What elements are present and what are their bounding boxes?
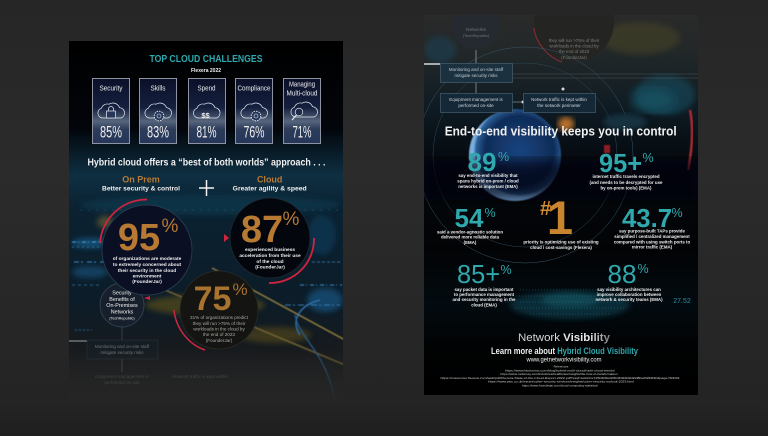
circle: 87 percent xyxy=(224,198,314,283)
card: spend: $$ xyxy=(201,111,210,120)
card: spend: 81% xyxy=(196,122,216,142)
faded flow box xyxy=(69,326,158,372)
on prem label: Better security & control xyxy=(102,186,180,193)
circle: 87 percent: acceleration from their use xyxy=(239,253,301,259)
faded lower boxes xyxy=(95,374,228,385)
faded circle 75 xyxy=(533,20,614,62)
cloud label: Cloud xyxy=(257,175,282,185)
circle: 95 percent: their security in the cloud xyxy=(118,268,176,274)
circle: 87 percent: % xyxy=(283,209,300,230)
stat: #1 priority xyxy=(524,201,598,250)
panel: end-to-end visibility xyxy=(417,0,698,395)
card: compliance xyxy=(236,78,272,144)
on prem label xyxy=(102,176,180,192)
stat: 95+ percent: by on-prem tools) (EMA) xyxy=(601,186,652,190)
references: https://www.factioninc.com/blog/hybrid-multi-cloud/multi-cloud-trends/ xyxy=(505,368,615,372)
stat: 95+ percent: % xyxy=(642,151,654,165)
stat: 89 percent: say end-to-end visibility that xyxy=(458,173,518,178)
circle: 75 percent: the end of 2023 xyxy=(203,332,235,337)
circle: 75 percent: 75 xyxy=(194,280,231,318)
stat: 85+ percent xyxy=(452,264,516,308)
cloud label xyxy=(232,176,306,192)
stat: 95+ percent xyxy=(590,153,662,190)
circle: 87 percent: (FounderJar) xyxy=(255,264,285,270)
city lights image xyxy=(72,195,345,400)
arrow marker xyxy=(144,296,150,300)
stat: 54 percent: % xyxy=(484,206,496,220)
stat: 85+ percent: and security monitoring in the xyxy=(453,297,516,302)
stat: 85+ percent: % xyxy=(500,263,512,277)
circle: 95 percent: 95 xyxy=(118,217,160,259)
cloud label: Greater agility & speed xyxy=(233,186,307,193)
circle: 75 percent: (FounderJar) xyxy=(206,338,233,343)
flow boxes: Monitoring and on-site staff xyxy=(449,67,504,72)
stat: 43.7 percent: simplified / centralized management xyxy=(614,234,690,239)
stat: 88 percent: network & security teams (EMA) xyxy=(595,297,663,302)
stat: 43.7 percent: mirror traffic (EMA) xyxy=(632,244,673,250)
references: https://www.mckinsey.com/industries/healthcare/insights/the-how-of-transformation xyxy=(500,372,618,376)
circle: 75 percent: 31% of organizations predict xyxy=(190,315,249,320)
faded circle 75: workloads in the cloud by xyxy=(549,44,599,48)
circle: security benefits xyxy=(100,283,144,327)
stat: 95+ percent: internet traffic travels encrypted xyxy=(592,174,660,179)
card: managing multi-cloud: Multi-cloud xyxy=(286,88,318,98)
circle: 95 percent: % xyxy=(162,216,179,237)
circle: 87 percent: of the cloud xyxy=(256,259,284,265)
faded circle 75: (FounderJar) xyxy=(561,55,587,60)
call to action: Learn more about Hybrid Cloud Visibility xyxy=(491,346,639,357)
flow boxes: Network traffic is kept within xyxy=(531,97,587,102)
circle: 87 percent: 87 xyxy=(241,209,283,251)
faded circle: (TechRepublic) xyxy=(463,33,490,38)
card: skills xyxy=(140,78,176,144)
references xyxy=(440,364,680,388)
stat: #1 priority: 1 xyxy=(547,191,573,244)
on prem label: On Prem xyxy=(122,175,160,185)
flow boxes: mitigate security risks xyxy=(454,73,498,78)
card: security: 85% xyxy=(100,122,122,142)
panel: top cloud challenges and hybrid cloud xyxy=(69,41,345,403)
stat: #1 priority: priority is optimizing use of existing xyxy=(523,240,599,244)
card: skills: 83% xyxy=(147,122,169,142)
stat: 88 percent: 88 xyxy=(608,259,636,289)
circle: 95 percent: (FounderJar) xyxy=(132,279,162,285)
flow boxes: Equipment management is xyxy=(449,97,504,102)
stat: 89 percent: networks is important (EMA) xyxy=(458,184,518,189)
stat: #1 priority: # xyxy=(540,198,551,220)
stat: 85+ percent: 85+ xyxy=(457,259,500,289)
website url: www.getnetworkvisibility.com xyxy=(526,356,602,364)
card: skills: Skills xyxy=(150,84,166,92)
stat: 54 percent: (EMA) xyxy=(464,240,477,245)
references: https://www.founderjar.com/cloud-computing-statistics/ xyxy=(522,384,598,388)
faded lower boxes: Equipment management is xyxy=(95,374,150,379)
teal data field image xyxy=(505,290,640,319)
circle: 75 percent: workloads in the cloud by xyxy=(193,326,245,332)
stat: 89 percent: spans hybrid on-prem / cloud xyxy=(457,178,519,184)
card: compliance: 76% xyxy=(244,122,264,142)
card: spend: Spend xyxy=(198,84,216,92)
stat: 89 percent: % xyxy=(498,150,509,164)
faded lower boxes: performed on-site xyxy=(104,380,140,385)
references: https://www.pwc.co.uk/issues/cyber-security-services/insights/cyber-security-outlook-2023.html xyxy=(488,380,634,384)
circle: security benefits: Networks xyxy=(111,310,134,316)
circle: 95 percent: of organizations are moderate xyxy=(113,256,182,262)
circle: 75 percent xyxy=(174,271,258,350)
subtitle: Flexera 2022 xyxy=(191,68,221,74)
faded flow box: mitigate security risks xyxy=(100,350,144,355)
card: compliance: Compliance xyxy=(238,84,270,92)
stat: 43.7 percent: 43.7 xyxy=(622,203,672,233)
stat: 54 percent: 54 xyxy=(455,203,484,233)
horizontal tech lines xyxy=(512,74,698,78)
stat: 95+ percent: 95+ xyxy=(599,148,642,178)
card: managing multi-cloud: Managing xyxy=(289,80,315,88)
card: managing multi-cloud: 71% xyxy=(292,122,312,142)
circle: security benefits: Security xyxy=(112,290,132,296)
circle: 75 percent: % xyxy=(232,280,248,299)
stat: 85+ percent: cloud (EMA) xyxy=(471,302,497,308)
heading: end-to-end visibility: End-to-end visibility keeps you in control xyxy=(445,124,677,139)
references: References xyxy=(554,364,569,368)
stat: 54 percent: said a vendor-agnostic solution xyxy=(437,230,503,234)
faded circle 75: they will run >75% of their xyxy=(549,38,600,43)
stat: #1 priority: cloud / cost-savings (Flexera) xyxy=(530,245,592,250)
flow boxes: performed on-site xyxy=(458,103,494,108)
card: spend xyxy=(188,78,226,144)
circle: 75 percent: they will run >75% of their xyxy=(193,321,246,326)
top faded image xyxy=(424,22,695,115)
stat: 54 percent: delivered more reliable data xyxy=(441,234,500,240)
stat: 85+ percent: say packet data is important xyxy=(454,287,514,292)
stat: 43.7 percent: say purpose-built TAPs provide xyxy=(619,228,685,234)
stat: 85+ percent: to performance management xyxy=(454,292,515,297)
faded lower boxes: Network traffic is kept within xyxy=(172,374,228,379)
side data readout: 27.52 xyxy=(673,298,691,305)
circle: security benefits: On-Premises xyxy=(106,303,138,309)
stat: 43.7 percent: % xyxy=(671,206,683,220)
circle: 95 percent: to extremely concerned about xyxy=(113,262,182,268)
flow boxes xyxy=(424,50,596,112)
title: TOP CLOUD CHALLENGES xyxy=(150,53,262,65)
card: security: Security xyxy=(100,84,123,92)
faded circle 75: the end of 2023 xyxy=(559,49,590,54)
stat: 88 percent: say visibility architectures can xyxy=(597,287,661,292)
stat: 88 percent: % xyxy=(637,262,649,276)
card: managing multi-cloud xyxy=(284,78,320,144)
circle: 95 percent: environment xyxy=(133,274,162,280)
faded circle: Networks xyxy=(466,27,487,33)
heading: best of both worlds: Hybrid cloud offers a “best of both worlds” approach . . . xyxy=(88,157,326,169)
card: security xyxy=(92,78,130,144)
circle: 87 percent: experienced business xyxy=(245,247,295,253)
circle: 95 percent xyxy=(100,199,192,295)
stat: 88 percent: improve collaboration between xyxy=(597,292,662,297)
references: https://resources.flexera.com/web/pdf/Flexera-State-of-the-Cloud-Report-2022.pdf?elqTrackId=e7250406ef2f4b3b90fd3d2fd8bef0293f4b#page=60034 xyxy=(440,376,680,380)
stat: 54 percent xyxy=(437,208,503,245)
stat: 89 percent: 89 xyxy=(468,147,496,177)
stat: 43.7 percent: compared with using switch ports to xyxy=(614,239,690,244)
stat: 95+ percent: (and needs to be decrypted for use xyxy=(590,180,663,185)
flow boxes: the network perimeter xyxy=(537,103,581,108)
faded circle xyxy=(462,28,490,38)
circle: security benefits: (TechRepublic) xyxy=(109,316,135,320)
stat: 88 percent xyxy=(596,264,662,302)
stat: 89 percent xyxy=(457,152,518,189)
logo: network visibility: Network Visibility xyxy=(518,332,611,344)
faded flow box: Monitoring and on-site staff xyxy=(95,344,150,349)
plus icon xyxy=(199,180,214,196)
globe and rings image xyxy=(417,47,698,263)
stat: 43.7 percent xyxy=(614,208,690,250)
circle: security benefits: Benefits of xyxy=(109,297,135,303)
